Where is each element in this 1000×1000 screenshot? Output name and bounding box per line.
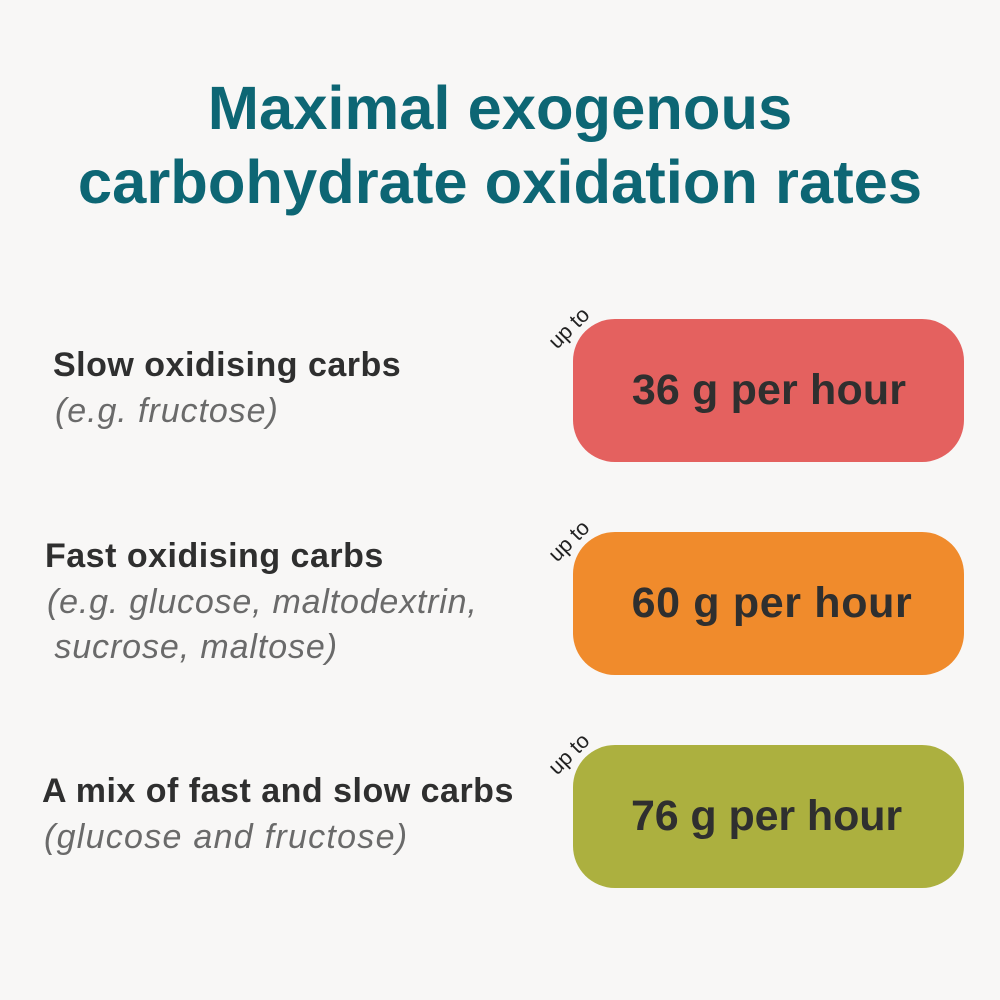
label: fast oxidising carbs: (e.g. glucose, maltodextrin, [47,583,478,621]
value pill: 60 g per hour: 60 g per hour [632,579,912,627]
up to annotation 2: up to [544,516,594,566]
label: slow oxidising carbs: Slow oxidising carbs [53,346,401,384]
label: slow oxidising carbs: (e.g. fructose) [55,392,279,430]
label: mix of fast and slow carbs: (glucose and fructose) [44,818,408,856]
title [78,74,922,217]
value pill: 76 g per hour: 76 g per hour [631,792,902,840]
value pill: 36 g per hour [573,319,964,462]
label: fast oxidising carbs: sucrose, maltose) [54,628,338,666]
title: Maximal exogenous [208,74,792,143]
up to annotation 1: up to [544,303,594,353]
value pill: 76 g per hour [573,745,964,888]
label: fast oxidising carbs: Fast oxidising carbs [45,537,384,575]
label: mix of fast and slow carbs: A mix of fast and slow carbs [42,772,514,810]
title: carbohydrate oxidation rates [78,148,922,217]
label: fast oxidising carbs [45,537,478,666]
value pill: 36 g per hour: 36 g per hour [632,366,906,414]
up to annotation 3: up to [544,729,594,779]
value pill: 60 g per hour [573,532,964,675]
label: slow oxidising carbs [53,346,401,430]
label: mix of fast and slow carbs [42,772,514,856]
